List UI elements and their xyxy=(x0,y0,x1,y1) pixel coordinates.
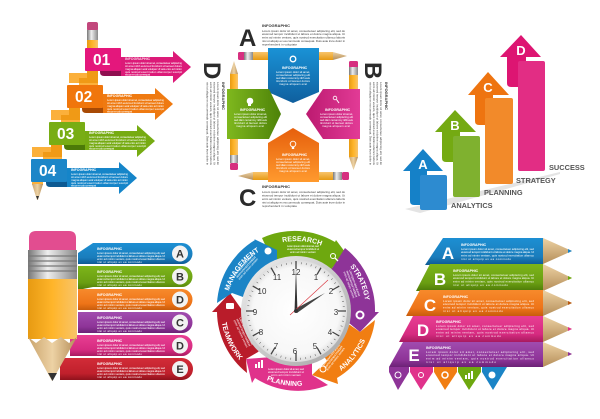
text analytics: eiusmod tempor incididunt xyxy=(323,345,344,369)
text management: eiusmod tempor incididunt xyxy=(235,255,257,279)
ribbon A: A xyxy=(176,248,184,260)
arrow bar B: B xyxy=(450,118,460,133)
arrow 03: quis nostrud exerci tation ullamcorper suscipit xyxy=(89,144,146,148)
panel: slanted pencil ribbons xyxy=(389,238,572,390)
text management xyxy=(233,253,259,281)
ribbon pencil B: eiusmod tempor incididunt ut labore et dolore magna aliqua. Ut xyxy=(453,276,534,280)
ribbon D: consectetuer adipiscing elit xyxy=(234,115,267,119)
ribbon C xyxy=(78,312,192,333)
ribbon C xyxy=(268,128,319,182)
text strategy xyxy=(342,269,362,299)
text block A: Lorem ipsum dolor sit amet, consectetuer adipiscing elit, sed do xyxy=(262,29,345,33)
icon: four pencils xyxy=(230,52,358,180)
arrow bar C: C xyxy=(483,80,493,95)
clock: 10 xyxy=(258,287,267,296)
label strategy: STRATEGY xyxy=(516,176,556,185)
ribbon B: INFOGRAPHIC xyxy=(325,108,351,112)
clock: 8 xyxy=(259,328,264,337)
ribbon pencil B: enim ad minim veniam, quis nostrud exercitation ullamco xyxy=(453,280,534,284)
text block D: eiusmod tempor incididunt ut labore et dolore magna aliqua. Ut xyxy=(212,82,216,165)
icon: briefcase xyxy=(226,303,234,309)
arrow 04: quis nostrud exerci tation ullamcorper suscipit xyxy=(71,181,128,185)
ribbon pencil A xyxy=(425,238,572,265)
ribbon B: enim ad minim veniam, quis nostrud exercitation ullamco xyxy=(97,280,165,284)
ribbon D pink: nisi ut aliquip ex ea commodo xyxy=(97,352,142,356)
arrow 03: Lorem ipsum dolor sit amet, consectetuer adipiscing xyxy=(89,135,146,139)
clock: 1 xyxy=(314,273,319,282)
ribbon pencil C: nisi ut aliquip ex ea commodo xyxy=(443,309,503,313)
arrow 04: magna aliquam erat volutpat. Ut wisi enim ad minim xyxy=(71,178,129,182)
ribbon B xyxy=(78,266,192,290)
ribbon A xyxy=(268,48,319,103)
ribbon D pink: INFOGRAPHIC xyxy=(97,339,123,343)
arrow 04: Lorem ipsum dolor sit amet, consectetuer adipiscing xyxy=(71,172,128,176)
ribbon B: Lorem ipsum dolor sit amet, xyxy=(320,112,353,116)
ribbon pencil C: eiusmod tempor incididunt ut labore et dolore magna aliqua. Ut xyxy=(443,302,534,306)
arrow 01: ea commodo consequat xyxy=(125,72,150,76)
text block A: nisi ut aliquip ex ea commodo consequat. Duis aute irure dolor in xyxy=(262,39,345,43)
ribbon B: Lorem ipsum dolor sit amet, consectetuer adipiscing elit, sed xyxy=(97,274,165,278)
arrow 01: quis nostrud exerci tation ullamcorper suscipit xyxy=(125,70,182,74)
ribbon B: magna aliquam erat xyxy=(322,124,350,128)
ribbon B xyxy=(306,89,360,139)
ribbon D orange: eiusmod tempor incididunt ut labore et dolore magna aliqua. Ut xyxy=(97,300,165,304)
label success: SUCCESS xyxy=(549,163,585,172)
ribbon B: consectetuer adipiscing elit xyxy=(320,115,353,119)
arrow 04 xyxy=(31,159,137,194)
text planning xyxy=(268,367,304,377)
arrow bar D xyxy=(500,35,545,171)
text block C: nisi ut aliquip ex ea commodo consequat. Duis aute irure dolor in xyxy=(262,200,345,204)
text planning: enim ad minim veniam xyxy=(271,373,302,377)
clock: 6 xyxy=(293,347,298,356)
ribbon pencil A: Lorem ipsum dolor sit amet, consectetuer adipiscing elit, sed xyxy=(461,247,534,251)
ribbon D: INFOGRAPHIC xyxy=(240,108,266,112)
icon: gear xyxy=(356,312,364,318)
ribbon pencil C xyxy=(406,290,572,316)
label planning: PLANNING xyxy=(267,376,302,386)
text planning: eiusmod tempor incididunt ut xyxy=(268,370,304,374)
icon: large pencil xyxy=(28,231,77,381)
arrow 03: ea commodo consequat xyxy=(89,146,114,150)
ribbon E: Lorem ipsum dolor sit amet, consectetuer adipiscing elit, sed xyxy=(97,366,165,370)
text management: enim ad minim veniam xyxy=(237,257,259,281)
arrow bar C xyxy=(468,72,513,184)
ribbon C: tincidunt ut laoreet dolore xyxy=(276,166,310,170)
ribbon A: sed diam nonummy nibh euis xyxy=(276,76,311,80)
text block B: nisi ut aliquip ex ea commodo consequat. Duis aute irure dolor in xyxy=(368,82,372,165)
icon: magnifier xyxy=(330,254,338,261)
ribbon E xyxy=(60,358,193,380)
arrow 02: ea commodo consequat xyxy=(107,110,132,114)
label analytics: ANALYTICS xyxy=(451,201,493,210)
text strategy: enim ad minim veniam xyxy=(342,271,356,299)
ribbon pencil C: C xyxy=(424,296,436,315)
panel: rising arrows chart xyxy=(403,35,585,213)
text teamwork: Lorem ipsum dolor sit amet xyxy=(238,317,254,346)
ribbon D: magna aliquam erat xyxy=(236,124,264,128)
label research: RESEARCH xyxy=(282,236,322,246)
ribbon C: eiusmod tempor incididunt ut labore et dolore magna aliqua. Ut xyxy=(97,323,165,327)
clock: 9 xyxy=(253,308,258,317)
ribbon A: Lorem ipsum dolor sit amet, consectetuer adipiscing elit, sed xyxy=(97,251,165,255)
ribbon A: INFOGRAPHIC xyxy=(97,247,123,251)
segment planning xyxy=(246,311,328,391)
ribbon D orange: enim ad minim veniam, quis nostrud exercitation ullamco xyxy=(97,303,165,307)
arrow 04: ea commodo consequat xyxy=(71,184,96,188)
text block C: enim ad minim veniam, quis nostrud exercitation ullamco laboris xyxy=(262,197,346,201)
ribbon C: INFOGRAPHIC xyxy=(97,316,123,320)
ribbon D orange: nisi ut aliquip ex ea commodo xyxy=(97,306,142,310)
ribbon B: B xyxy=(176,272,184,284)
ribbon A: enim ad minim veniam, quis nostrud exercitation ullamco xyxy=(97,257,165,261)
text block D: INFOGRAPHIC xyxy=(221,82,226,110)
arrow 03: sit amet nibh euismod tincidunt ut laoreet dolore xyxy=(89,138,146,142)
label management: MANAGEMENT xyxy=(224,247,258,290)
ribbon E: E xyxy=(176,364,184,376)
icon: head xyxy=(264,248,272,254)
ribbon pencil E: eiusmod tempor incididunt ut labore et dolore magna aliqua. Ut xyxy=(426,353,534,357)
arrow 01: INFOGRAPHIC xyxy=(125,57,151,61)
ribbon D xyxy=(227,89,281,139)
ribbon pencil D: nisi ut aliquip ex ea commodo xyxy=(436,334,501,338)
ribbon D orange xyxy=(78,289,192,310)
clock: 12 xyxy=(292,268,301,277)
ribbon D pink: eiusmod tempor incididunt ut labore et dolore magna aliqua. Ut xyxy=(97,346,165,350)
ribbon D orange: D xyxy=(176,294,184,306)
ribbon pencil B: Lorem ipsum dolor sit amet, consectetuer adipiscing elit, sed xyxy=(453,273,534,277)
ribbon pencil B xyxy=(416,264,572,291)
segment analytics xyxy=(296,311,375,384)
text block D: Lorem ipsum dolor sit amet, consectetuer adipiscing elit, sed do xyxy=(216,82,220,165)
text analytics xyxy=(321,343,346,371)
ribbon B: tincidunt ut laoreet dolore xyxy=(320,121,353,125)
ribbon pencil E: enim ad minim veniam, quis nostrud exercitation ullamco xyxy=(426,356,534,360)
shadows xyxy=(405,172,560,213)
arrow 04: 04 xyxy=(39,163,57,180)
ribbon pencil B: B xyxy=(434,270,446,289)
ribbon A: eiusmod tempor incididunt ut labore et dolore magna aliqua. Ut xyxy=(97,254,165,258)
ribbon B: nisi ut aliquip ex ea commodo xyxy=(97,283,142,287)
clock: 2 xyxy=(329,287,334,296)
clock: 5 xyxy=(313,342,318,351)
text planning: Lorem ipsum dolor sit amet, sed xyxy=(268,367,304,371)
ribbon D: tincidunt ut laoreet dolore xyxy=(234,121,267,125)
text block B: INFOGRAPHIC xyxy=(384,82,389,110)
arrow 01: sit amet nibh euismod tincidunt ut laoreet dolore xyxy=(125,64,182,68)
arrow 03: magna aliquam erat volutpat. Ut wisi enim ad minim xyxy=(89,141,147,145)
pins xyxy=(389,367,507,390)
arrow 03 xyxy=(49,122,155,157)
arrow bar A xyxy=(403,149,447,210)
text block D xyxy=(206,82,226,166)
ribbon pencil D: D xyxy=(417,321,429,340)
arrow 01: Lorem ipsum dolor sit amet, consectetuer adipiscing xyxy=(125,61,182,65)
arrow 02: Lorem ipsum dolor sit amet, consectetuer adipiscing xyxy=(107,98,164,102)
ribbon A: magna aliquam erat xyxy=(279,82,307,86)
text block C: Lorem ipsum dolor sit amet, consectetuer adipiscing elit, sed do xyxy=(262,190,345,194)
ribbon B: sed diam nonummy nibh euis xyxy=(320,118,354,122)
ribbon D pink: enim ad minim veniam, quis nostrud exercitation ullamco xyxy=(97,349,165,353)
text block A: INFOGRAPHIC xyxy=(262,23,290,28)
clock: 4 xyxy=(328,328,333,337)
arrow 02: magna aliquam erat volutpat. Ut wisi enim ad minim xyxy=(107,104,165,108)
text research: enim ad minim veniam xyxy=(290,250,317,254)
panel: pencil with labelled ribbons xyxy=(28,231,193,381)
ribbon C: Lorem ipsum dolor sit amet, consectetuer adipiscing elit, sed xyxy=(97,320,165,324)
ribbon E: eiusmod tempor incididunt ut labore et dolore magna aliqua. Ut xyxy=(97,369,165,373)
text teamwork xyxy=(233,317,255,349)
arrow bar A: A xyxy=(418,157,428,172)
icon: bulb xyxy=(320,366,326,372)
label planning: PLANNING xyxy=(484,188,523,197)
text research: Lorem ipsum dolor sit amet, sed xyxy=(287,244,319,248)
clock: 11 xyxy=(273,273,282,282)
ribbon pencil A: eiusmod tempor incididunt ut labore et dolore magna aliqua. Ut xyxy=(461,250,534,254)
text analytics: Lorem ipsum dolor sit amet xyxy=(321,343,341,368)
ribbon pencil B: nisi ut aliquip ex ea commodo xyxy=(453,283,508,287)
text teamwork: eiusmod tempor incididunt xyxy=(235,318,252,347)
letter A: A xyxy=(239,25,256,52)
segment management xyxy=(217,239,296,311)
ribbon C: sed diam nonummy nibh euis xyxy=(276,163,311,167)
ribbon pencil E: nisi ut aliquip ex ea commodo xyxy=(426,360,496,364)
ribbon pencil E: Lorem ipsum dolor sit amet, consectetuer adipiscing elit, sed xyxy=(426,350,534,354)
ribbon C: consectetuer adipiscing elit xyxy=(276,160,310,164)
text strategy: eiusmod tempor incididunt xyxy=(345,270,359,298)
ribbon D pink: Lorem ipsum dolor sit amet, consectetuer adipiscing elit, sed xyxy=(97,343,165,347)
ribbon pencil D: INFOGRAPHIC xyxy=(436,320,462,324)
panel: ABCD pencil cross xyxy=(198,23,389,212)
text block C: INFOGRAPHIC xyxy=(262,184,290,189)
ribbon E: enim ad minim veniam, quis nostrud exercitation ullamco xyxy=(97,372,165,376)
arrow 01: 01 xyxy=(93,52,111,69)
arrow 03: 03 xyxy=(57,126,75,143)
ribbon pencil C: enim ad minim veniam, quis nostrud exercitation ullamco xyxy=(443,306,534,310)
ribbon A xyxy=(78,243,192,264)
arrow 02: 02 xyxy=(75,89,92,106)
ribbon pencil C: Lorem ipsum dolor sit amet, consectetuer adipiscing elit, sed xyxy=(443,299,534,303)
ribbon D: sed diam nonummy nibh euis xyxy=(234,118,268,122)
text block B: Lorem ipsum dolor sit amet, consectetuer adipiscing elit, sed do xyxy=(379,82,383,165)
ribbon B: INFOGRAPHIC xyxy=(97,270,123,274)
text strategy: Lorem ipsum dolor sit amet xyxy=(348,269,361,297)
arrow 02: sit amet nibh euismod tincidunt ut laoreet dolore xyxy=(107,101,164,105)
ribbon pencil A: INFOGRAPHIC xyxy=(461,243,487,247)
ribbon pencil D: enim ad minim veniam, quis nostrud exercitation ullamco xyxy=(436,330,534,334)
ribbon pencil E: INFOGRAPHIC xyxy=(426,346,452,350)
icon: bars xyxy=(255,360,263,368)
ribbon C: magna aliquam erat xyxy=(279,169,307,173)
text teamwork: enim ad minim veniam xyxy=(233,319,249,349)
panel: numbered arrows pencil xyxy=(31,22,191,200)
text block B: eiusmod tempor incididunt ut labore et dolore magna aliqua. Ut xyxy=(376,82,380,165)
ribbon C: INFOGRAPHIC xyxy=(282,153,308,157)
ribbon pencil C: INFOGRAPHIC xyxy=(443,295,469,299)
ribbon D: Lorem ipsum dolor sit amet, xyxy=(234,112,267,116)
text block C xyxy=(262,184,346,208)
letter C: C xyxy=(239,185,256,212)
ribbon D orange: Lorem ipsum dolor sit amet, consectetuer adipiscing elit, sed xyxy=(97,297,165,301)
ribbon C: C xyxy=(176,318,184,330)
ribbon A: nisi ut aliquip ex ea commodo xyxy=(97,260,142,264)
arrow 02: INFOGRAPHIC xyxy=(107,94,133,98)
icon: staircase pencil xyxy=(32,22,98,200)
arrow 02 xyxy=(67,85,173,120)
ribbon C: enim ad minim veniam, quis nostrud exercitation ullamco xyxy=(97,326,165,330)
letter B: B xyxy=(359,62,386,79)
ribbon A: consectetuer adipiscing elit xyxy=(276,73,310,77)
ribbon D pink xyxy=(70,335,192,356)
text analytics: enim ad minim veniam xyxy=(325,346,346,371)
segment strategy xyxy=(296,248,379,332)
panel: clock cycle xyxy=(212,230,379,391)
ribbon B: eiusmod tempor incididunt ut labore et dolore magna aliqua. Ut xyxy=(97,277,165,281)
ribbon D pink: D xyxy=(176,340,184,352)
ribbon pencil A: A xyxy=(442,244,454,263)
arrow 02: quis nostrud exerci tation ullamcorper suscipit xyxy=(107,107,164,111)
ribbon pencil D xyxy=(399,316,572,342)
ribbon E: nisi ut aliquip ex ea commodo xyxy=(97,375,142,379)
text research xyxy=(287,244,319,254)
ribbon pencil E xyxy=(389,342,572,367)
text block A: eiusmod tempor incididunt ut labore et dolore magna aliqua. Ut xyxy=(262,32,345,36)
segment teamwork xyxy=(212,293,296,373)
text research: eiusmod tempor incididunt ut xyxy=(287,247,319,251)
ribbon E: INFOGRAPHIC xyxy=(97,362,123,366)
arrow bar D: D xyxy=(516,43,526,58)
clock: 7 xyxy=(274,342,279,351)
ribbon pencil A: enim ad minim veniam, quis nostrud exercitation ullamco xyxy=(461,254,534,258)
arrow 03: INFOGRAPHIC xyxy=(89,131,115,135)
label strategy: STRATEGY xyxy=(350,264,370,300)
text block B: enim ad minim veniam, quis nostrud exercitation ullamco laboris xyxy=(372,82,376,166)
text block A: reprehenderit in voluptate xyxy=(262,42,297,46)
text block A: enim ad minim veniam, quis nostrud exercitation ullamco laboris xyxy=(262,36,346,40)
text block C: eiusmod tempor incididunt ut labore et dolore magna aliqua. Ut xyxy=(262,194,345,198)
text block C: reprehenderit in voluptate xyxy=(262,204,297,208)
letter D: D xyxy=(198,62,225,79)
ribbon C: Lorem ipsum dolor sit amet, xyxy=(276,157,310,161)
ribbon pencil E: E xyxy=(408,346,420,365)
arrow 04: INFOGRAPHIC xyxy=(71,168,97,172)
text block B xyxy=(368,82,389,166)
text block D: nisi ut aliquip ex ea commodo consequat. Duis aute irure dolor in xyxy=(206,82,210,165)
ribbon pencil A: nisi ut aliquip ex ea commodo xyxy=(461,257,511,261)
ribbon A: tincidunt ut laoreet dolore xyxy=(276,79,310,83)
ribbon A: INFOGRAPHIC xyxy=(282,66,308,70)
clock xyxy=(241,256,351,366)
ribbon A: Lorem ipsum dolor sit amet, xyxy=(276,70,310,74)
clock: 3 xyxy=(334,308,339,317)
text management: Lorem ipsum dolor sit amet xyxy=(233,253,255,277)
ribbon D orange: INFOGRAPHIC xyxy=(97,293,123,297)
ribbon pencil D: eiusmod tempor incididunt ut labore et dolore magna aliqua. Ut xyxy=(436,327,534,331)
arrow 04: sit amet nibh euismod tincidunt ut laoreet dolore xyxy=(71,175,128,179)
segment research xyxy=(262,231,345,311)
text block A xyxy=(262,23,346,46)
text block D: enim ad minim veniam, quis nostrud exercitation ullamco laboris xyxy=(209,82,213,166)
label analytics: ANALYTICS xyxy=(340,339,365,371)
ribbon C: nisi ut aliquip ex ea commodo xyxy=(97,329,142,333)
ribbon pencil B: INFOGRAPHIC xyxy=(453,269,479,273)
label teamwork: TEAMWORK xyxy=(222,322,243,360)
arrow 01: magna aliquam erat volutpat. Ut wisi enim ad minim xyxy=(125,67,183,71)
arrow bar B xyxy=(435,110,480,197)
ribbon pencil D: Lorem ipsum dolor sit amet, consectetuer adipiscing elit, sed xyxy=(436,324,534,328)
arrow 01 xyxy=(85,48,191,83)
